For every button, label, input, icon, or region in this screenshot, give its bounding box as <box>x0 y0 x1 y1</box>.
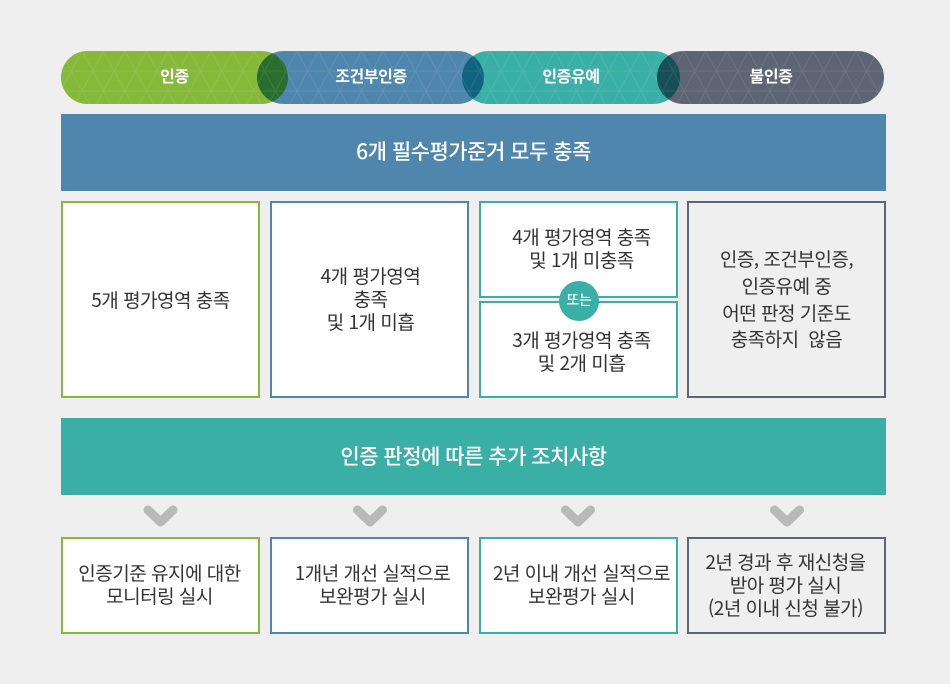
criteria box: 불인증 <box>687 201 886 398</box>
criteria box: 불인증: 충족하지 않음 <box>731 325 842 352</box>
pill: 조건부인증 <box>257 51 484 104</box>
arrows: chevrons pointing down <box>144 506 804 526</box>
pill labels <box>160 63 793 87</box>
criteria box: 인증유예 option 2: 및 2개 미흡 <box>538 348 625 376</box>
criteria box: 조건부인증: 4개 평가영역 <box>321 262 420 289</box>
action box: 불인증: 받아 평가 실시 <box>730 571 841 598</box>
action box: 인증유예 <box>479 537 678 634</box>
criteria box: 불인증: 인증, 조건부인증, <box>720 245 853 272</box>
action box: 불인증: 2년 경과 후 재신청을 <box>705 548 866 575</box>
pill labels: 인증유예 <box>542 63 600 87</box>
legend pills: certification outcomes <box>61 51 884 104</box>
action box: 인증: 모니터링 실시 <box>106 582 213 608</box>
arrow 3 <box>566 510 590 522</box>
criteria box: 인증유예 option 1 <box>479 201 678 298</box>
criteria box: 조건부인증: 충족 <box>354 285 387 312</box>
arrow 2 <box>358 510 382 522</box>
pill: 인증 <box>61 51 288 104</box>
action box: 조건부인증: 1개년 개선 실적으로 <box>295 558 450 586</box>
action box: 인증유예: 2년 이내 개선 실적으로 <box>493 558 670 586</box>
criteria box: 조건부인증: 및 1개 미흡 <box>327 308 414 335</box>
pill: 인증유예 <box>462 51 668 104</box>
criteria box: 인증유예 option 2: 3개 평가영역 충족 <box>512 326 651 352</box>
action box: 조건부인증 <box>270 537 469 634</box>
criteria box: 인증유예 option 1: 4개 평가영역 충족 <box>512 222 651 250</box>
criteria box: 인증유예 option 1: 및 1개 미충족 <box>529 246 634 272</box>
badge: 또는: 또는 <box>566 290 592 310</box>
heading band: 6개 필수평가준거 모두 충족: 6개 필수평가준거 모두 충족 <box>356 136 591 166</box>
criteria box: 인증 <box>61 201 260 398</box>
action box: 인증: 인증기준 유지에 대한 <box>78 558 241 586</box>
action box: 조건부인증: 보완평가 실시 <box>319 582 426 608</box>
pill labels: 불인증 <box>750 63 793 87</box>
heading band: 인증 판정에 따른 추가 조치사항 <box>61 418 886 495</box>
badge: 또는 <box>559 281 599 321</box>
heading band: 인증 판정에 따른 추가 조치사항: 인증 판정에 따른 추가 조치사항 <box>340 440 607 470</box>
criteria box: 불인증: 어떤 판정 기준도 <box>722 298 851 326</box>
action box: 불인증 <box>687 537 886 634</box>
criteria box: 불인증: 인증유예 중 <box>742 272 831 299</box>
criteria box: 인증유예 option 2 <box>479 301 678 398</box>
arrow 4 <box>774 510 800 522</box>
criteria box: 조건부인증 <box>270 201 469 398</box>
pill labels: 인증 <box>160 63 189 87</box>
action box: 불인증: (2년 이내 신청 불가) <box>708 594 863 621</box>
action box: 인증유예: 보완평가 실시 <box>528 582 635 608</box>
pill labels: 조건부인증 <box>335 63 407 87</box>
heading band: 6개 필수평가준거 모두 충족 <box>61 114 886 191</box>
criteria box: 인증: 5개 평가영역 충족 <box>91 286 230 313</box>
pill: 불인증 <box>657 51 884 104</box>
action box: 인증 <box>61 537 260 634</box>
arrow 1 <box>148 510 173 522</box>
